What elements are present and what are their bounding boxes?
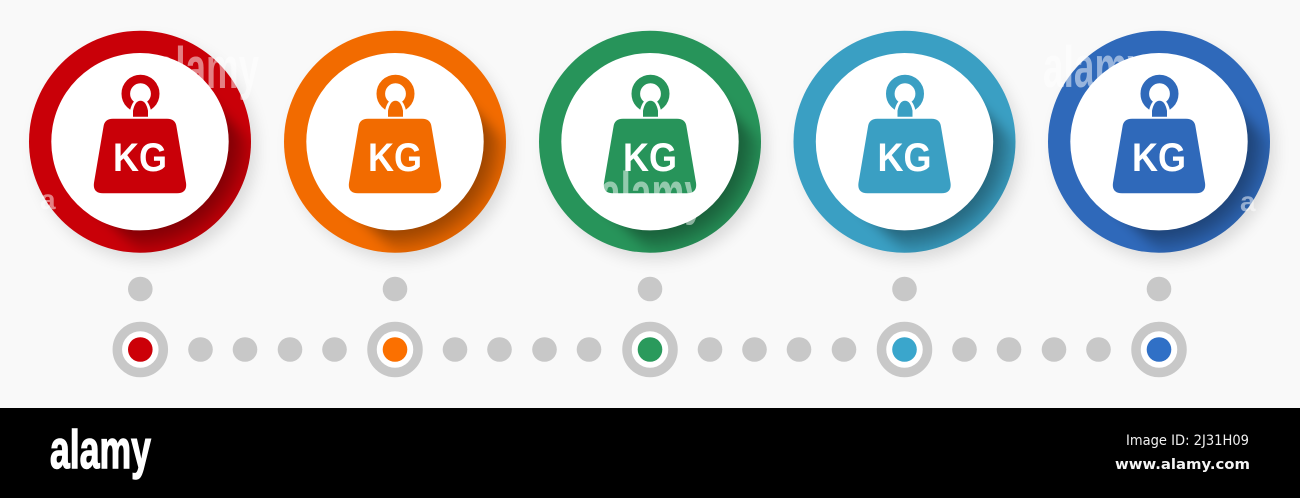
- icon: green KG weight badge: KG: [623, 136, 677, 180]
- timeline marker: blue: [1136, 326, 1182, 372]
- icon: teal KG weight badge: [793, 30, 1025, 264]
- icon: blue KG weight badge: [1048, 30, 1280, 264]
- icon: red KG weight badge: KG: [113, 136, 167, 180]
- icon: orange KG weight badge: [284, 30, 516, 264]
- footer bar: [0, 408, 1300, 498]
- watermarks: alamy: [155, 36, 259, 101]
- timeline small dots: [188, 337, 1111, 362]
- icon: blue KG weight badge: KG: [1132, 136, 1186, 180]
- icon: teal KG weight badge: KG: [878, 136, 932, 180]
- top connector dots: [128, 277, 1171, 301]
- watermarks: a: [40, 184, 56, 215]
- icon: green KG weight badge: [538, 30, 770, 264]
- watermarks: a: [1240, 186, 1256, 217]
- logo: alamy: alamy: [50, 420, 151, 480]
- icon: orange KG weight badge: KG: [368, 136, 422, 180]
- timeline marker: green: [627, 326, 673, 372]
- icon: red KG weight badge: [28, 30, 260, 264]
- website: www.alamy.com: [1115, 457, 1250, 473]
- timeline marker: red: [117, 326, 163, 372]
- image ID: Image ID: 2J31H09: [1126, 433, 1249, 449]
- watermarks: [40, 35, 1256, 226]
- timeline marker: orange: [372, 326, 418, 372]
- watermarks: alamy: [1043, 35, 1148, 100]
- watermarks: alamy: [600, 161, 705, 226]
- timeline marker: teal: [882, 326, 928, 372]
